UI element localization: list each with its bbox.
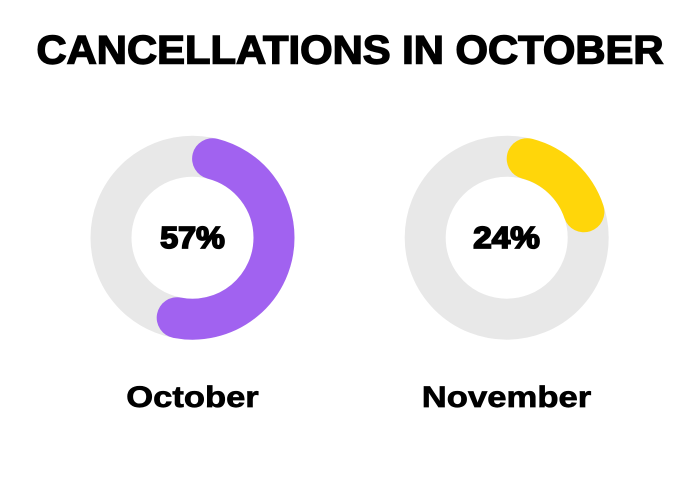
value: 57%: 57%: [160, 220, 225, 255]
label: November: November: [422, 381, 592, 414]
value: 24%: 24%: [473, 220, 540, 255]
label: October: October: [126, 381, 259, 414]
chart: October donut: [111, 156, 274, 319]
title: CANCELLATIONS IN OCTOBER: [36, 28, 664, 72]
arc: October 57%: [177, 159, 274, 319]
arc: November 24%: [527, 159, 584, 212]
chart: November donut: [425, 156, 588, 319]
